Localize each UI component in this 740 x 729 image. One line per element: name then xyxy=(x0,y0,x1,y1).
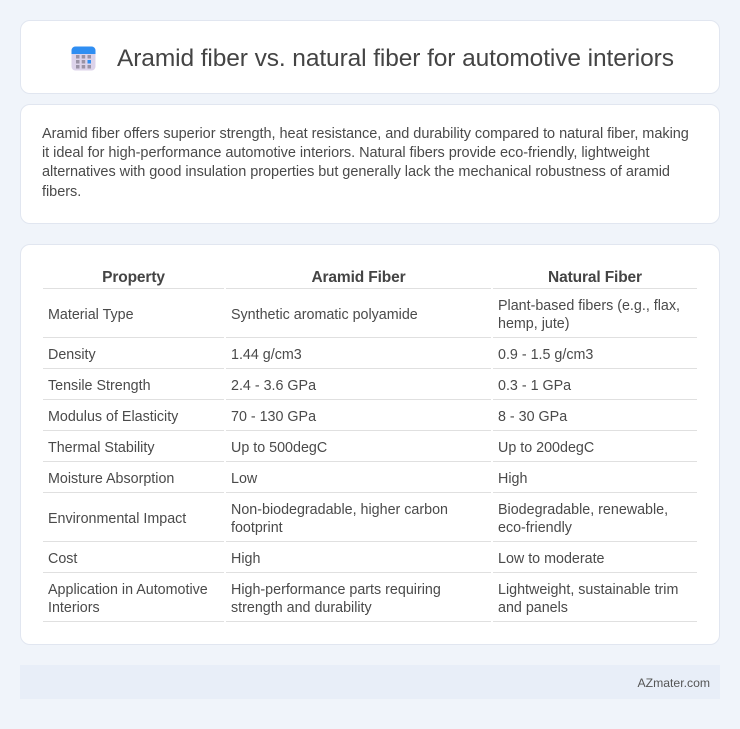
row: Material Type: Plant-based fibers (e.g., flax, xyxy=(498,298,680,314)
row: Density: 0.9 - 1.5 g/cm3 xyxy=(498,347,593,363)
row: Cost: Cost xyxy=(48,551,77,567)
row: Application in Automotive Interiors: High-performance parts requiring xyxy=(231,582,441,598)
row: Application in Automotive Interiors: and panels xyxy=(498,600,568,616)
summary text: alternatives with good insulation properties but generally lack the mechanical robustness of aramid xyxy=(42,164,670,180)
row: Thermal Stability xyxy=(48,440,594,456)
row: Density: Density xyxy=(48,347,96,363)
row: Material Type xyxy=(48,298,680,332)
row: Modulus of Elasticity: Modulus of Elasticity xyxy=(48,409,178,425)
row: Application in Automotive Interiors: Interiors xyxy=(48,600,100,616)
row: Cost: Low to moderate xyxy=(498,551,604,567)
row: Tensile Strength: 2.4 - 3.6 GPa xyxy=(231,378,316,394)
row: Application in Automotive Interiors: Lightweight, sustainable trim xyxy=(498,582,678,598)
row: Thermal Stability: Thermal Stability xyxy=(48,440,154,456)
footer bar xyxy=(20,665,720,699)
summary text: Aramid fiber offers superior strength, heat resistance, and durability compared to natural fiber, making xyxy=(42,126,689,142)
row: Material Type: Material Type xyxy=(48,307,134,323)
row: Cost: High xyxy=(231,551,260,567)
row: Material Type: hemp, jute) xyxy=(498,316,570,332)
row: Moisture Absorption: High xyxy=(498,471,527,487)
table card xyxy=(20,244,720,645)
title: Aramid fiber vs. natural fiber for automotive interiors xyxy=(117,45,674,72)
row: Tensile Strength: Tensile Strength xyxy=(48,378,151,394)
row: Moisture Absorption: Low xyxy=(231,471,257,487)
row: Environmental Impact xyxy=(48,502,668,536)
row: Moisture Absorption xyxy=(48,471,527,487)
row: Modulus of Elasticity xyxy=(48,409,568,425)
footer text: AZmater.com xyxy=(638,676,710,690)
row: Cost xyxy=(48,551,604,567)
row: Application in Automotive Interiors: Application in Automotive xyxy=(48,582,208,598)
row: Modulus of Elasticity: 8 - 30 GPa xyxy=(498,409,567,425)
row: Application in Automotive Interiors: strength and durability xyxy=(231,600,372,616)
row: Density: 1.44 g/cm3 xyxy=(231,347,302,363)
row: Environmental Impact: footprint xyxy=(231,520,283,536)
row: Tensile Strength: 0.3 - 1 GPa xyxy=(498,378,571,394)
header: Property: Property xyxy=(102,269,165,286)
row: Thermal Stability: Up to 500degC xyxy=(231,440,327,456)
header: Aramid Fiber: Aramid Fiber xyxy=(311,269,406,286)
summary text: it ideal for high-performance automotive interiors. Natural fibers provide eco-friendly, lightweight xyxy=(42,145,649,161)
summary text: fibers. xyxy=(42,184,81,200)
row: Material Type: Synthetic aromatic polyamide xyxy=(231,307,418,323)
title card xyxy=(20,20,720,94)
row: Moisture Absorption: Moisture Absorption xyxy=(48,471,174,487)
row: Environmental Impact: eco-friendly xyxy=(498,520,572,536)
row: Tensile Strength xyxy=(48,378,572,394)
summary card xyxy=(20,104,720,224)
summary text xyxy=(42,126,689,200)
icon: calendar xyxy=(72,46,96,70)
row: Density xyxy=(48,347,593,363)
row: Application in Automotive Interiors xyxy=(48,582,678,616)
row: Environmental Impact: Environmental Impact xyxy=(48,511,186,527)
row: Environmental Impact: Biodegradable, renewable, xyxy=(498,502,668,518)
header: Natural Fiber: Natural Fiber xyxy=(548,269,642,286)
row: Modulus of Elasticity: 70 - 130 GPa xyxy=(231,409,316,425)
comparison table xyxy=(43,269,697,622)
row: Environmental Impact: Non-biodegradable, higher carbon xyxy=(231,502,448,518)
row: Thermal Stability: Up to 200degC xyxy=(498,440,594,456)
